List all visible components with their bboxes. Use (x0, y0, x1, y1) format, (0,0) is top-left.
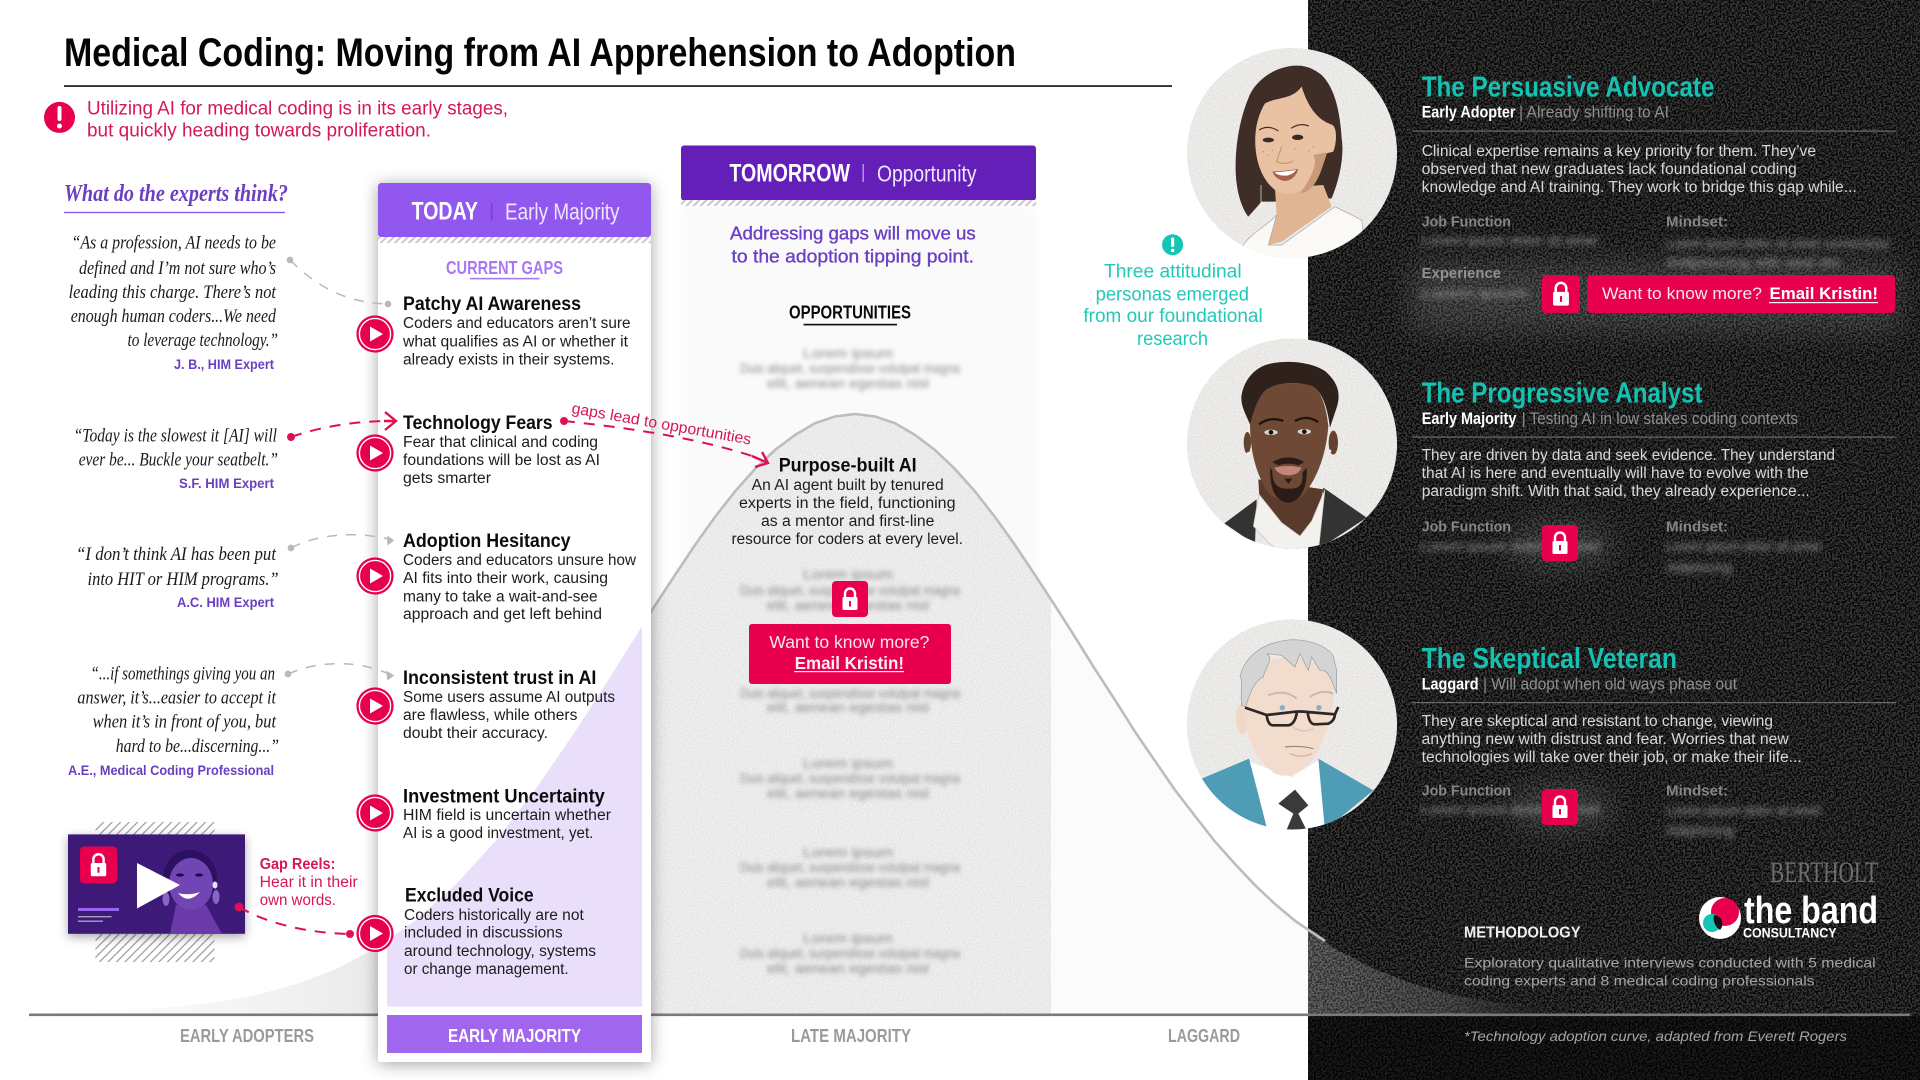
call to action: email Kristin: Email Kristin! (1770, 284, 1878, 303)
gap reels caption: Gap Reels: (260, 856, 335, 873)
tomorrow subtitle (730, 222, 976, 267)
call to action: email Kristin (1587, 275, 1895, 313)
blurred opportunity 4 (740, 755, 960, 801)
opportunity: purpose-built AI: Purpose-built AI (779, 456, 917, 477)
chart: technology adoption bell curve (187, 412, 1538, 1014)
persona: the skeptical veteran: They are skeptical and resistant to change, viewing (1422, 713, 1773, 730)
persona: the progressive analyst: Job Function (1422, 520, 1511, 536)
gap reels caption: Hear it in their (260, 874, 358, 891)
gap: adoption hesitancy: approach and get left behind (403, 606, 602, 623)
portrait: progressive analyst (1187, 338, 1397, 553)
opportunity: purpose-built AI: resource for coders at every level. (732, 531, 963, 548)
gap: inconsistent trust in AI: doubt their accuracy. (403, 725, 548, 742)
persona: the persuasive advocate: Mindset: (1666, 215, 1728, 231)
persona: the skeptical veteran: Job Function (1422, 784, 1511, 800)
gap: technology fears: foundations will be lost as AI (403, 452, 600, 469)
opportunity: purpose-built AI: experts in the field, functioning (739, 495, 956, 512)
panel: tomorrow column body (681, 206, 1036, 1014)
blurred opportunity 3: Duis aliquet, suspendisse volutpat magna (740, 685, 960, 701)
chart: early majority curve fill (387, 626, 642, 1006)
callout: three attitudinal personas (1083, 234, 1263, 350)
arrow: quote 2 to technology fears (288, 412, 396, 440)
opportunity: purpose-built AI (732, 456, 963, 548)
quote: J.B.: leading this charge. There’s not (69, 282, 277, 303)
arrow: gaps lead to opportunities (561, 418, 768, 467)
arrow: quote 4 to inconsistent trust (285, 664, 393, 679)
quote: A.E.: hard to be...discerning...” (116, 736, 279, 757)
arrow: quote 3 to adoption hesitancy (288, 535, 393, 551)
opportunity: purpose-built AI: An AI agent built by tenured (752, 477, 944, 494)
title rule (64, 85, 1172, 87)
persona: the persuasive advocate: Lorem ipsum dolor sit amet consectetur (1666, 235, 1890, 251)
quote: J.B.: defined and I’m not sure who’s (79, 258, 276, 279)
gap: inconsistent trust in AI: are flawless, while others (403, 707, 578, 724)
gap: adoption hesitancy: Coders and educators unsure how (403, 552, 637, 569)
icon: lock (1542, 789, 1578, 825)
arrow: gap reels to excluded voice (236, 904, 353, 937)
persona: the persuasive advocate: Adipiscing elit sed do (1666, 254, 1840, 270)
blurred opportunity 6: Lorem ipsum (803, 930, 893, 946)
panel: tomorrow header: TOMORROW (729, 160, 850, 188)
blurred opportunity 4: Duis aliquet, suspendisse volutpat magna (740, 770, 960, 786)
quote: S.F. (74, 426, 278, 491)
title: Medical Coding: Moving from AI Apprehension to Adoption (64, 31, 1016, 75)
callout: three attitudinal personas: from our foundational (1083, 306, 1263, 327)
persona: the skeptical veteran: Lorem ipsum dolor sit amet (1421, 801, 1600, 817)
persona: the progressive analyst: They are driven by data and seek evidence. They understand (1422, 447, 1835, 464)
intro statement: Utilizing AI for medical coding is in its early stages, (87, 98, 508, 120)
panel: tomorrow header: Opportunity (877, 161, 977, 187)
quote: J.B.: “As a profession, AI needs to be (72, 233, 276, 254)
persona: the skeptical veteran: | Will adopt when old ways phase out (1483, 674, 1737, 693)
gap: inconsistent trust in AI: Some users assume AI outputs (403, 689, 615, 706)
persona: the skeptical veteran: Laggard (1422, 674, 1479, 693)
gap reels caption (260, 856, 358, 909)
arrow: quote 1 to patchy AI awareness (287, 257, 391, 307)
heading: opportunities: OPPORTUNITIES (789, 303, 911, 323)
icon: lock (1542, 275, 1580, 313)
gap: inconsistent trust in AI: Inconsistent trust in AI (403, 668, 596, 689)
gap: patchy AI awareness (402, 294, 630, 368)
gap: excluded voice: Excluded Voice (405, 886, 534, 907)
quote: A.C.: “I don’t think AI has been put (76, 544, 277, 565)
blurred opportunity 4: Lorem ipsum (803, 755, 893, 771)
blurred opportunity 2: Lorem ipsum (803, 566, 893, 582)
footnote: *Technology adoption curve, adapted from Everett Rogers (1464, 1028, 1847, 1044)
heading: current gaps: CURRENT GAPS (446, 258, 563, 278)
panel: dark persona background (1308, 0, 1920, 1080)
call to action: email Kristin: Email Kristin! (795, 653, 904, 673)
play buttons (356, 315, 394, 952)
axis label: late majority: LATE MAJORITY (791, 1026, 911, 1046)
blurred opportunity 2: elit, aenean egestas nisl (767, 597, 929, 613)
gap: inconsistent trust in AI (403, 668, 615, 742)
persona: the progressive analyst: Early Majority (1422, 409, 1517, 428)
persona: the progressive analyst (1413, 378, 1896, 575)
gap: patchy AI awareness: what qualifies as AI or whether it (402, 333, 629, 350)
blurred opportunity 1: Duis aliquet, suspendisse volutpat magna (740, 360, 960, 376)
gap: adoption hesitancy (403, 531, 637, 623)
persona: the skeptical veteran: Adipiscing (1666, 822, 1734, 838)
quote: J.B.: enough human coders...We need (71, 306, 276, 327)
callout: three attitudinal personas: research (1137, 329, 1208, 350)
portrait: skeptical veteran (1187, 619, 1397, 834)
quote: A.E.: A.E., Medical Coding Professional (68, 762, 274, 778)
gap: adoption hesitancy: AI fits into their work, causing (403, 570, 608, 587)
callout: three attitudinal personas: Three attitudinal (1104, 261, 1242, 282)
gap: patchy AI awareness: Patchy AI Awareness (403, 294, 581, 315)
panel: tomorrow header (681, 146, 1036, 206)
axis label: early majority (387, 1015, 642, 1053)
methodology (1464, 925, 1876, 989)
today header: Early Majority (505, 199, 620, 225)
quote: J.B. (69, 233, 278, 372)
call to action: email Kristin (749, 624, 951, 684)
blurred opportunity 2 (740, 566, 960, 613)
gap: excluded voice: around technology, systems (404, 943, 596, 960)
persona: the progressive analyst: Lorem ipsum dolor sit amet (1421, 538, 1600, 554)
blurred opportunity 5: Lorem ipsum (803, 844, 893, 860)
gap: investment uncertainty: HIM field is uncertain whether (403, 807, 611, 824)
blurred opportunity 5: elit, aenean egestas nisl (767, 874, 929, 890)
blurred opportunity 6 (740, 930, 960, 976)
axis label: early majority: EARLY MAJORITY (448, 1026, 581, 1046)
blurred opportunity 5 (740, 844, 960, 890)
heading: what do the experts think: What do the experts think? (64, 181, 288, 207)
persona: the persuasive advocate: observed that new graduates lack foundational coding (1422, 161, 1797, 178)
gap: excluded voice: included in discussions (404, 925, 563, 942)
persona: the skeptical veteran (1413, 643, 1896, 838)
video thumbnail: gap reels (68, 822, 245, 962)
call to action: email Kristin: Want to know more? (1602, 284, 1762, 303)
logo: the band consultancy (1699, 890, 1878, 941)
axis label: laggard: LAGGARD (1168, 1026, 1240, 1046)
persona: the persuasive advocate: | Already shifting to AI (1519, 103, 1669, 122)
persona: the progressive analyst: | Testing AI in low stakes coding contexts (1522, 409, 1798, 428)
persona: the skeptical veteran: Mindset: (1666, 784, 1728, 800)
gap: investment uncertainty: Investment Uncertainty (403, 786, 605, 807)
panel: today card (375, 183, 655, 1062)
persona: the persuasive advocate: Early Adopter (1422, 103, 1516, 122)
blurred opportunity 4: elit, aenean egestas nisl (767, 785, 929, 801)
quote: S.F.: S.F. HIM Expert (179, 475, 274, 491)
callout: three attitudinal personas: personas emerged (1096, 284, 1249, 305)
persona: the skeptical veteran: technologies will take over their job, or make their life... (1422, 749, 1802, 766)
persona: the skeptical veteran: The Skeptical Veteran (1422, 643, 1677, 675)
persona: the skeptical veteran: Lorem ipsum dolor sit amet (1666, 802, 1821, 818)
quote: S.F.: “Today is the slowest it [AI] will (74, 426, 277, 446)
call to action: email Kristin: Want to know more? (769, 632, 930, 652)
tomorrow subtitle: Addressing gaps will move us (730, 222, 976, 244)
logo: the band consultancy: the band (1744, 890, 1878, 932)
icon: alert (44, 102, 75, 133)
methodology: Exploratory qualitative interviews conducted with 5 medical (1464, 955, 1876, 971)
gap: technology fears: Fear that clinical and coding (403, 434, 598, 451)
today header: TODAY (412, 198, 478, 226)
logo: the band consultancy: CONSULTANCY (1743, 925, 1837, 941)
gap: technology fears: gets smarter (403, 470, 491, 487)
gap: patchy AI awareness: Coders and educators aren’t sure (403, 315, 630, 332)
persona: the persuasive advocate: Experience (1422, 266, 1501, 282)
persona: the progressive analyst: The Progressive Analyst (1422, 378, 1703, 410)
gap: adoption hesitancy: Adoption Hesitancy (403, 531, 571, 552)
gap: excluded voice: or change management. (404, 961, 569, 978)
quote: A.E.: answer, it’s...easier to accept it (77, 688, 277, 709)
gap: technology fears (403, 413, 600, 487)
quote: A.C.: A.C. HIM Expert (177, 594, 274, 610)
arrow label: gaps lead to opportunities (570, 400, 753, 449)
quote: A.C.: into HIT or HIM programs.” (88, 569, 278, 590)
persona: the persuasive advocate: Job Function (1422, 215, 1511, 231)
methodology: METHODOLOGY (1464, 925, 1581, 942)
quote: A.E. (68, 664, 279, 778)
blurred opportunity 5: Duis aliquet, suspendisse volutpat magna (740, 859, 960, 875)
gap: technology fears: Technology Fears (403, 413, 553, 434)
quote: S.F.: ever be... Buckle your seatbelt.” (79, 450, 278, 471)
persona: the persuasive advocate: The Persuasive Advocate (1422, 72, 1714, 104)
quote: J.B.: J. B., HIM Expert (174, 356, 274, 372)
persona: the progressive analyst: Adipiscing (1666, 559, 1732, 575)
gap reels caption: own words. (260, 892, 336, 909)
blurred opportunity 1: Lorem ipsum (803, 345, 893, 361)
persona: the progressive analyst: that AI is here and eventually will have to evolve with the (1422, 465, 1809, 482)
axis baseline (29, 1014, 1910, 1016)
blurred opportunity 6: Duis aliquet, suspendisse volutpat magna (740, 945, 960, 961)
methodology: coding experts and 8 medical coding professionals (1464, 973, 1814, 989)
persona: the persuasive advocate: Lorem ipsum dolor sit amet (1421, 232, 1598, 248)
intro statement (87, 98, 508, 142)
opportunity: purpose-built AI: as a mentor and first-line (761, 513, 934, 530)
gap: investment uncertainty (403, 786, 611, 842)
icon: lock (1542, 525, 1578, 561)
tomorrow subtitle: to the adoption tipping point. (732, 246, 974, 267)
portrait: persuasive advocate (1187, 48, 1397, 262)
blurred opportunity 1 (740, 345, 960, 391)
persona: the persuasive advocate (1410, 72, 1900, 332)
blurred opportunity 3 (740, 685, 960, 715)
quote: J.B.: to leverage technology.” (128, 330, 278, 351)
intro statement: but quickly heading towards proliferation. (87, 120, 431, 142)
quote: A.C. (76, 544, 278, 610)
persona: the progressive analyst: Lorem ipsum dolor sit amet (1666, 538, 1821, 554)
persona: the persuasive advocate: Lorem ipsum (1421, 285, 1528, 301)
gap: excluded voice (404, 886, 596, 978)
gap: adoption hesitancy: many to take a wait-and-see (403, 588, 598, 605)
gap: patchy AI awareness: already exists in their systems. (403, 351, 614, 368)
quote: A.E.: when it’s in front of you, but (93, 712, 277, 733)
gap: excluded voice: Coders historically are not (404, 907, 584, 924)
blurred opportunity 2: Duis aliquet, suspendisse volutpat magna (740, 582, 960, 598)
persona: the progressive analyst: Mindset: (1666, 520, 1728, 536)
quote: A.E.: “...if somethings giving you an (90, 664, 275, 684)
blurred opportunity 3: elit, aenean egestas nisl (767, 699, 929, 715)
icon: lock (832, 581, 868, 617)
persona: the persuasive advocate: Clinical expertise remains a key priority for them. They’ve (1422, 143, 1816, 160)
blurred opportunity 1: elit, aenean egestas nisl (767, 375, 929, 391)
signature: BERTHOLT (1770, 856, 1878, 889)
gap: investment uncertainty: AI is a good investment, yet. (403, 825, 593, 842)
persona: the progressive analyst: paradigm shift. With that said, they already experience... (1422, 483, 1810, 500)
blurred opportunity 6: elit, aenean egestas nisl (767, 960, 929, 976)
axis label: early adopters: EARLY ADOPTERS (180, 1026, 314, 1046)
persona: the persuasive advocate: knowledge and AI training. They work to bridge this gap while... (1422, 179, 1857, 196)
today header (378, 183, 651, 243)
persona: the skeptical veteran: anything new with distrust and fear. Worries that new (1422, 731, 1790, 748)
